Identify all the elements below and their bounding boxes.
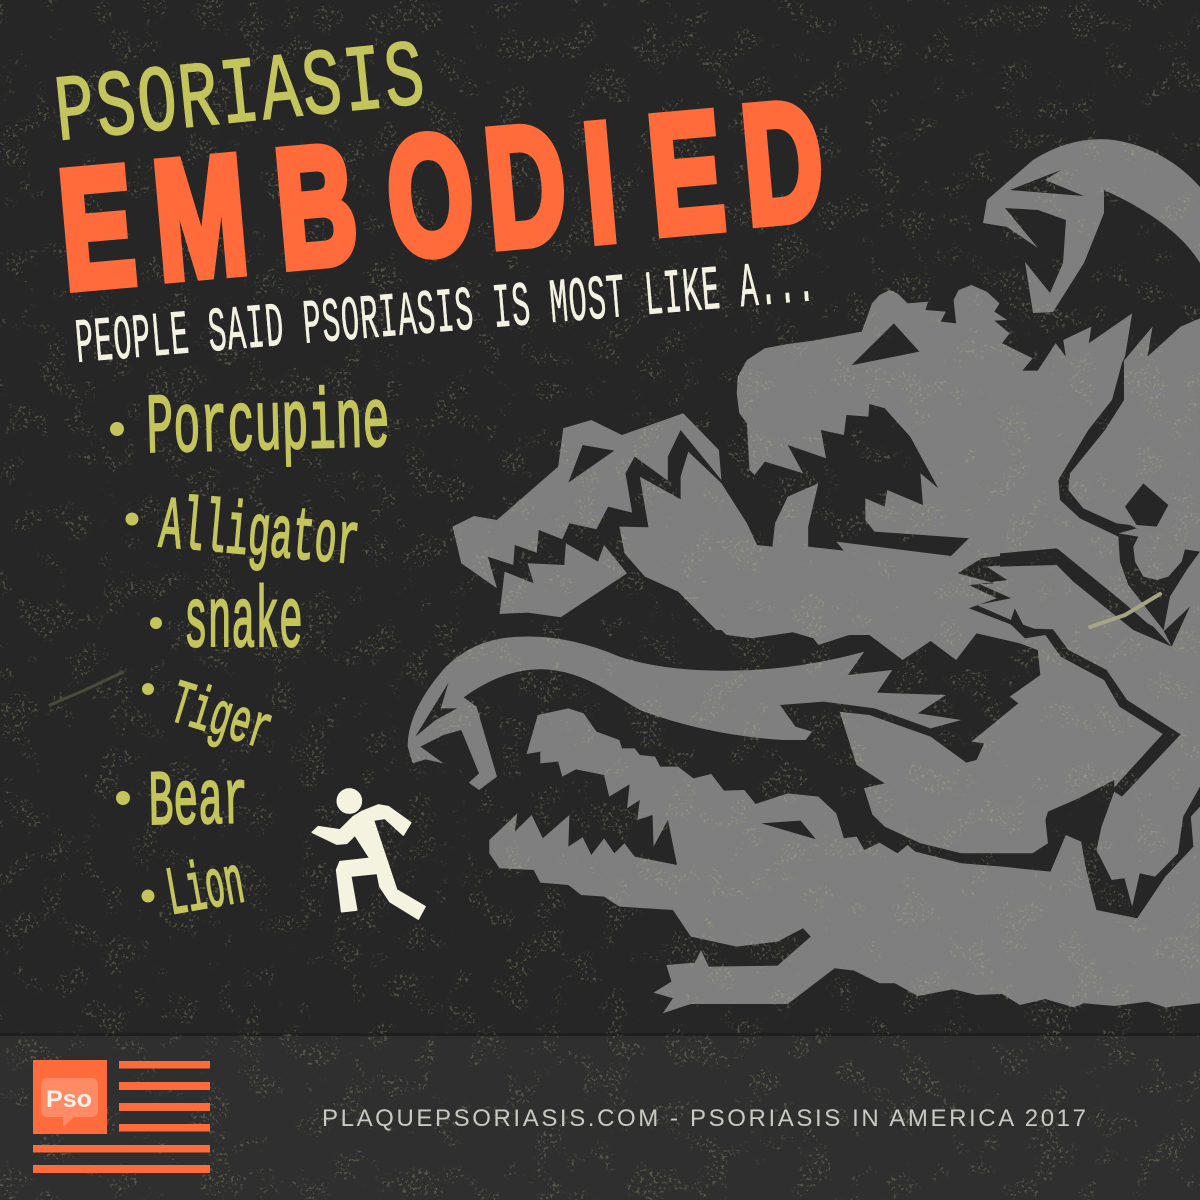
lion neck stroke: [1010, 608, 1181, 797]
paint streaks: [50, 594, 1160, 705]
list item: Snake: snake: [184, 575, 303, 673]
bear eye: [852, 323, 919, 365]
small alligator lower jaw: [499, 543, 627, 617]
bear head, lion mane and small alligator: [453, 285, 1200, 630]
small alligator upper jaw: [453, 413, 721, 588]
creature silhouette: [408, 139, 1200, 1013]
list item: Porcupine: Porcupine: [145, 376, 391, 478]
list of animals: [110, 376, 391, 934]
lower snake: [408, 637, 961, 790]
icon: running person: [312, 789, 425, 919]
main title: EMBODIED: EMBODIED: [52, 67, 831, 325]
footer band: [0, 1033, 1200, 1200]
list item: Alligator: Alligator: [156, 484, 362, 586]
logo: Pso flag: [33, 1060, 210, 1173]
large alligator and body: [489, 708, 1200, 1013]
list item: Tiger: Tiger: [161, 670, 280, 768]
lower mass and dark cuts: [691, 600, 1200, 937]
lion face lines: [1000, 330, 1200, 647]
snake head, top right: [983, 139, 1200, 313]
small title: PSORIASIS: PSORIASIS: [50, 25, 431, 169]
subtitle: PEOPLE SAID PSORIASIS IS MOST LIKE A...: [73, 248, 818, 381]
footer source text: PLAQUEPSORIASIS.COM - PSORIASIS IN AMERICA 2017: [322, 1105, 1086, 1132]
list item: Lion: Lion: [161, 845, 250, 934]
logo text: Pso: [46, 1086, 92, 1113]
logo speech bubble: [41, 1078, 98, 1127]
tiger and lion mass: [691, 600, 1200, 933]
dark cut behind tiger arm: [727, 632, 1200, 937]
paw top stroke: [1000, 548, 1172, 647]
list item: Bear: Bear: [148, 757, 249, 848]
jagged paw outline: [958, 549, 1155, 630]
lion nose: [1125, 483, 1168, 527]
